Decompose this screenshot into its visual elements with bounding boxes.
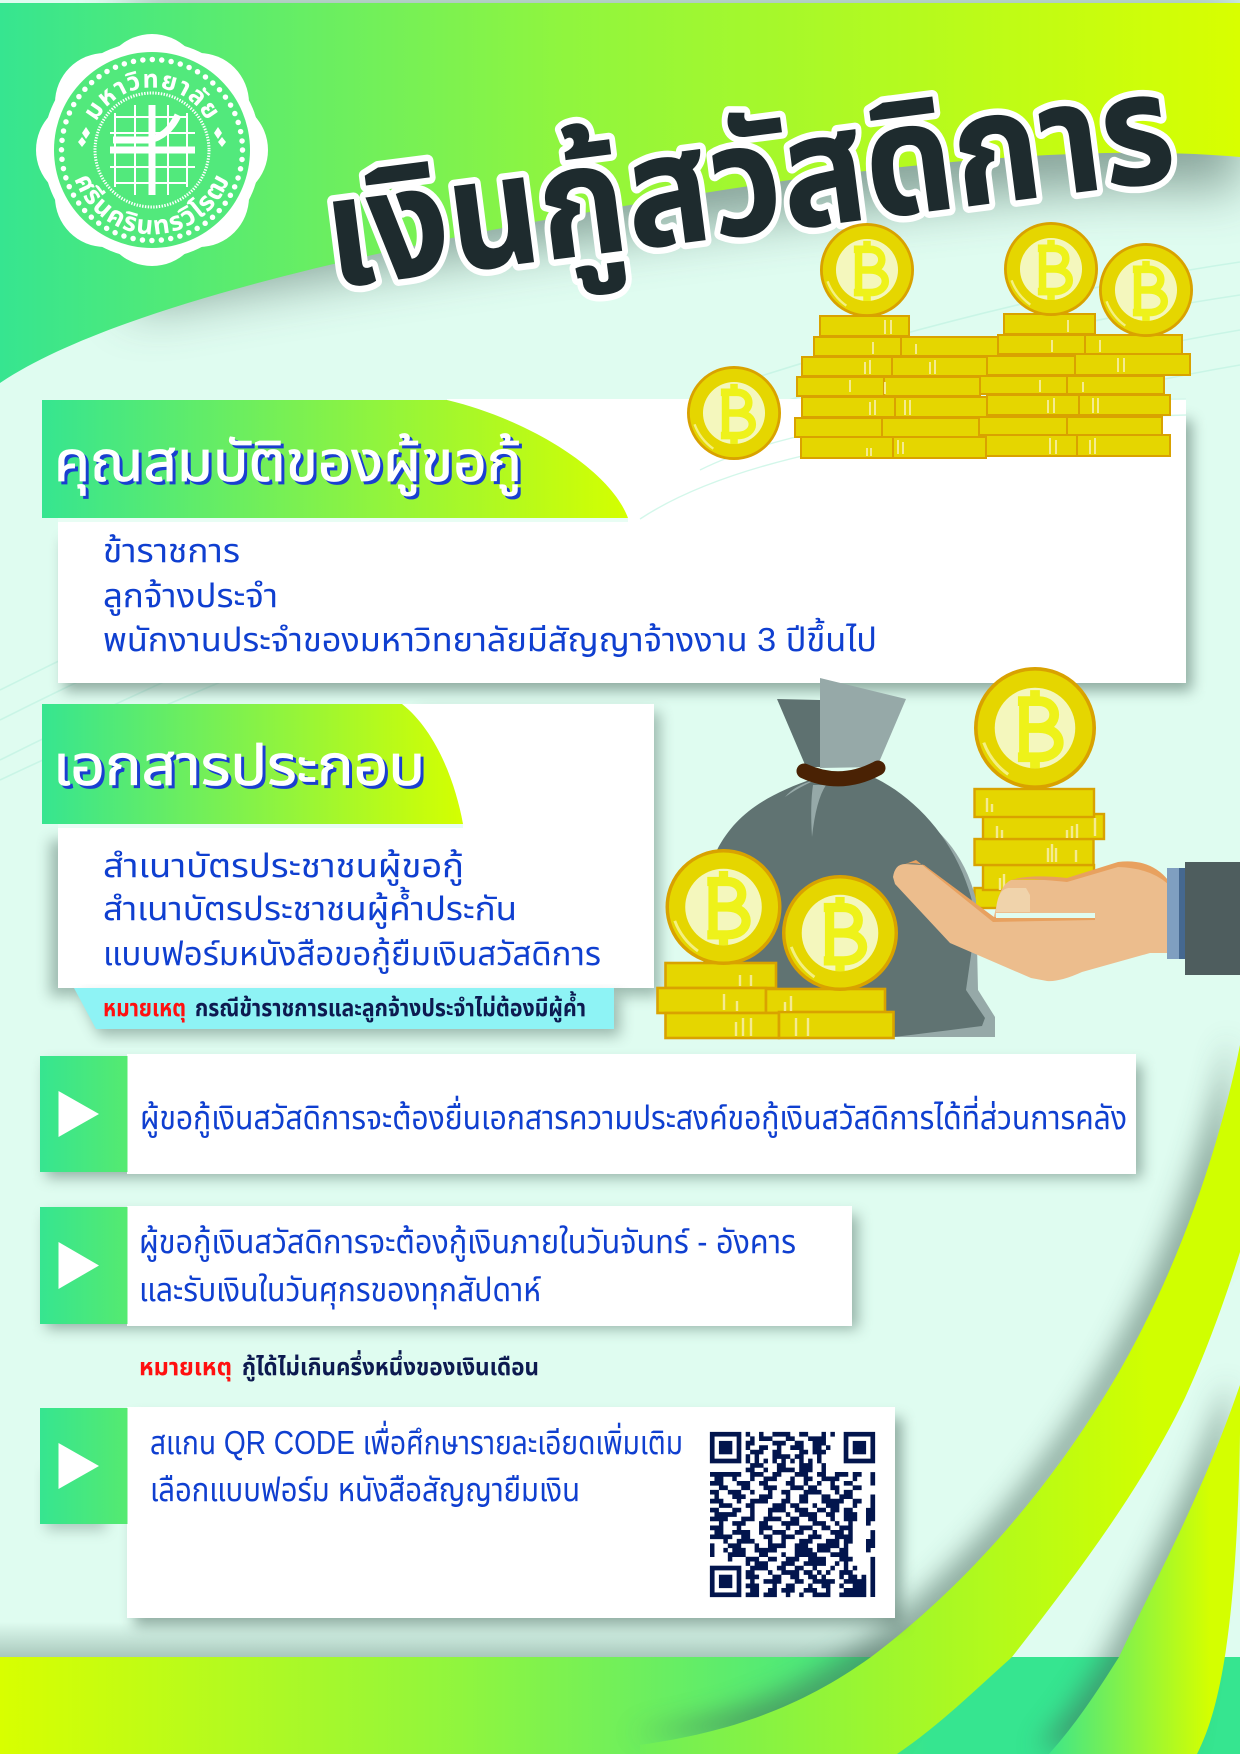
info row 2: และรับเงินในวันศุกรของทุกสัปดาห์: [139, 1271, 542, 1310]
note: loan limit: กู้ได้ไม่เกินครึ่งหนึ่งของเงินเดือน: [242, 1350, 539, 1382]
info row 1: [40, 1054, 1142, 1178]
eligibility heading: คุณสมบัติของผู้ขอกู้: [57, 433, 525, 499]
note: loan limit: [139, 1350, 539, 1382]
documents list: สำเนาบัตรประชาชนผู้ขอกู้: [103, 847, 464, 886]
panel: eligibility: [42, 399, 1192, 691]
eligibility heading: คุณสมบัติของผู้ขอกู้: [54, 430, 522, 496]
main swoosh: [640, 1045, 1240, 1754]
band top shading: [0, 1622, 960, 1658]
arrow block: [40, 1207, 128, 1324]
documents heading: เอกสารประกอบ: [53, 734, 425, 797]
logo: university seal: [36, 34, 268, 266]
illustration: hand: [893, 860, 1240, 981]
info row 2: [40, 1206, 858, 1329]
coin: [688, 367, 780, 459]
arrow block: [40, 1056, 128, 1172]
note: guarantor: หมายเหตุ: [103, 995, 186, 1023]
swoosh shadows: [628, 1033, 1228, 1748]
top band shadow: [130, 0, 1240, 310]
coin: [1005, 223, 1097, 315]
coin: [1100, 244, 1192, 336]
eligibility list: ลูกจ้างประจำ: [103, 577, 278, 616]
documents heading: [42, 704, 463, 824]
documents list: สำเนาบัตรประชาชนผู้ค้ำประกัน: [103, 886, 517, 929]
coin: [784, 877, 896, 989]
illustration: coins in front of bag: [658, 963, 894, 1038]
info row 3: [40, 1407, 902, 1626]
top gradient band: [0, 3, 1240, 383]
coin: [821, 224, 913, 316]
info row 3: สแกน QR CODE เพื่อศึกษารายละเอียดเพิ่มเติม: [150, 1420, 683, 1461]
logo: university seal: ศรีนครินทรวิโรฒ: [74, 175, 228, 234]
coins: top stack: [795, 314, 1190, 458]
note: loan limit: หมายเหตุ: [139, 1354, 232, 1382]
second swoosh: [1049, 1385, 1240, 1754]
bottom gradient band: [0, 1657, 1240, 1754]
eligibility list: ข้าราชการ: [103, 532, 240, 569]
note: guarantor: กรณีข้าราชการและลูกจ้างประจำไม่ต้องมีผู้ค้ำ: [195, 991, 586, 1023]
info row 3: เลือกแบบฟอร์ม หนังสือสัญญายืมเงิน: [150, 1471, 580, 1508]
info row 2: ผู้ขอกู้เงินสวัสดิการจะต้องกู้เงินภายในวันจันทร์ - อังคาร: [139, 1223, 796, 1262]
illustration: money bag: [700, 678, 995, 1037]
panel: documents: [42, 704, 660, 996]
QR code: [710, 1434, 873, 1597]
info row 1: ผู้ขอกู้เงินสวัสดิการจะต้องยื่นเอกสารความประสงค์ขอกู้เงินสวัสดิการได้ที่ส่วนการคลัง: [140, 1095, 1127, 1138]
arrow block: [40, 1408, 128, 1524]
eligibility list: [103, 532, 877, 658]
documents heading: เอกสารประกอบ: [56, 737, 428, 800]
note: guarantor: [74, 988, 620, 1036]
logo: university seal: มหาวิทยาลัย: [86, 70, 218, 120]
documents list: แบบฟอร์มหนังสือขอกู้ยืมเงินสวัสดิการ: [103, 935, 601, 974]
eligibility list: พนักงานประจำของมหาวิทยาลัยมีสัญญาจ้างงาน 3 ปีขึ้นไป: [103, 617, 877, 658]
illustration: coins in stack behind hand: [974, 789, 1104, 908]
eligibility heading: [42, 400, 628, 518]
coin: [667, 851, 780, 963]
documents list: [103, 847, 601, 974]
coin: [976, 669, 1094, 787]
